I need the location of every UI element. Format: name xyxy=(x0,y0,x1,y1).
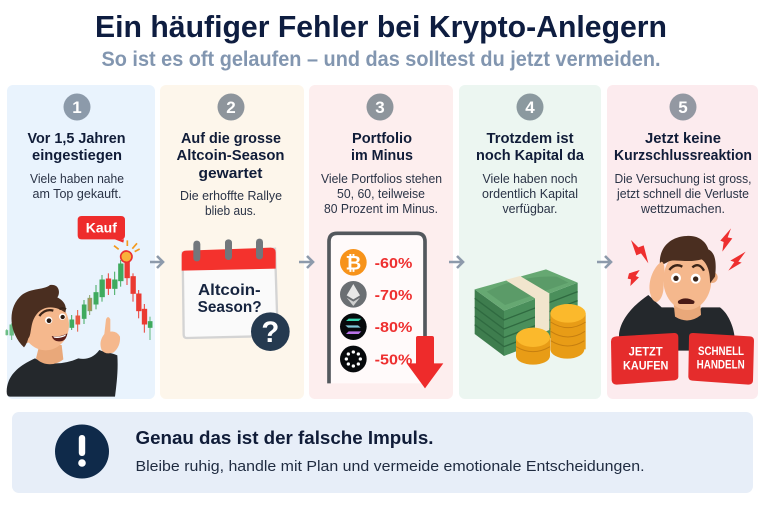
illustration: phone with crypto losses xyxy=(329,233,443,388)
body text: step 3: 80 Prozent im Minus. xyxy=(324,202,438,216)
subtitle: So ist es oft gelaufen – und das solltest du jetzt vermeiden. xyxy=(102,48,660,71)
step number 3: 3 xyxy=(375,98,385,117)
body text: step 4: verfügbar. xyxy=(502,202,558,216)
body text: step 2: blieb aus. xyxy=(205,204,256,218)
coin stacks xyxy=(516,304,586,365)
panel: step 1 xyxy=(6,85,155,399)
coin row: Ethereum -70% xyxy=(340,281,412,308)
step number 1 xyxy=(64,94,90,120)
arrow 3 to 4 xyxy=(449,256,463,268)
heading: step 4: noch Kapital da xyxy=(476,148,585,164)
arrow 2 to 3 xyxy=(299,256,313,268)
body text: step 5 xyxy=(614,172,752,216)
title: Ein häufiger Fehler bei Krypto-Anlegern xyxy=(95,9,667,44)
arrow: red down xyxy=(407,336,443,388)
step number 4 xyxy=(516,94,544,120)
icon: calendar with question mark xyxy=(182,239,290,351)
heading: step 2: Auf die grosse xyxy=(181,131,281,147)
body text: step 3: 50, 60, teilweise xyxy=(337,187,425,201)
body text: step 2: Die erhoffte Rallye xyxy=(180,189,282,203)
step number 2 xyxy=(218,94,244,120)
step number 1: 1 xyxy=(72,98,82,117)
arrow 4 to 5 xyxy=(597,256,611,268)
body text: step 4 xyxy=(482,172,578,216)
candlestick chart xyxy=(6,253,152,340)
coin row: Solana -80% xyxy=(340,313,412,340)
button: SCHNELL HANDELN xyxy=(688,333,754,385)
body text: step 4: Viele haben noch xyxy=(482,172,578,186)
step number 5 xyxy=(670,94,696,120)
person pointing up xyxy=(7,285,120,397)
heading: step 5 xyxy=(614,131,752,164)
panel: step 5 xyxy=(607,85,758,399)
illustration: money stack and coins xyxy=(475,269,586,365)
panel: step 2 xyxy=(160,85,304,399)
body text: step 3 xyxy=(321,172,442,216)
body text: step 4: ordentlich Kapital xyxy=(482,187,578,201)
callout banner xyxy=(12,412,753,493)
icon: calendar with question mark: Altcoin- xyxy=(198,282,261,299)
heading: step 3: im Minus xyxy=(351,148,413,164)
button: JETZT KAUFEN: JETZT xyxy=(629,346,663,359)
icon: calendar with question mark: ? xyxy=(261,316,279,349)
body text: step 1: am Top gekauft. xyxy=(32,187,122,201)
coin row: Polkadot -50% xyxy=(340,346,412,372)
body text: step 2 xyxy=(180,189,282,218)
body text: step 1 xyxy=(30,172,124,201)
illustration: stressed person with buttons xyxy=(611,228,754,385)
button: JETZT KAUFEN: KAUFEN xyxy=(623,359,668,372)
panel: step 3 xyxy=(309,85,453,399)
heading: step 5: Jetzt keine xyxy=(645,131,721,147)
heading: step 2: Altcoin-Season xyxy=(176,148,284,164)
callout text: Bleibe ruhig, handle mit Plan und vermeide emotionale Entscheidungen. xyxy=(136,459,644,475)
body text: step 5: jetzt schnell die Verluste xyxy=(616,187,749,201)
coin row: Bitcoin -60% xyxy=(340,249,412,276)
coin row: Ethereum -70%: -70% xyxy=(375,287,412,304)
heading: step 4: Trotzdem ist xyxy=(486,131,574,147)
body text: step 1: Viele haben nahe xyxy=(30,172,124,186)
coin row: Bitcoin -60%: ₿ xyxy=(345,253,361,274)
heading: step 1: eingestiegen xyxy=(32,148,122,164)
body text: step 5: Die Versuchung ist gross, xyxy=(614,172,752,186)
banknote stack xyxy=(475,269,578,356)
button: JETZT KAUFEN xyxy=(611,333,678,385)
step number 4: 4 xyxy=(525,98,535,117)
coin row: Polkadot -50%: -50% xyxy=(375,351,412,368)
buy marker xyxy=(114,240,140,262)
coin row: Bitcoin -60%: -60% xyxy=(375,255,412,272)
step number 2: 2 xyxy=(226,98,236,117)
callout: Kauf xyxy=(78,216,125,243)
illustration: candlestick chart with buy marker and pointing person xyxy=(6,216,152,397)
heading: step 2 xyxy=(176,131,284,182)
heading: step 5: Kurzschlussreaktion xyxy=(614,148,752,164)
body text: step 5: wettzumachen. xyxy=(640,202,725,216)
icon: exclamation mark xyxy=(55,424,109,478)
heading: step 4 xyxy=(476,131,585,164)
coin row: Solana -80%: -80% xyxy=(375,319,412,336)
icon: calendar with question mark: Season? xyxy=(198,299,262,316)
button: SCHNELL HANDELN: SCHNELL xyxy=(698,345,744,358)
arrow 1 to 2 xyxy=(150,256,163,268)
body text: step 3: Viele Portfolios stehen xyxy=(321,172,442,186)
step number 5: 5 xyxy=(678,98,688,117)
callout heading: Genau das ist der falsche Impuls. xyxy=(136,428,434,448)
button: SCHNELL HANDELN: HANDELN xyxy=(697,359,745,372)
heading: step 1: Vor 1,5 Jahren xyxy=(28,131,126,147)
panel: step 4 xyxy=(459,85,601,399)
lightning bolts xyxy=(628,228,746,286)
heading: step 3 xyxy=(351,131,413,164)
step number 3 xyxy=(366,94,394,120)
heading: step 3: Portfolio xyxy=(352,131,412,147)
stressed person xyxy=(619,236,734,351)
heading: step 2: gewartet xyxy=(198,166,263,182)
heading: step 1 xyxy=(28,131,126,164)
callout: Kauf: Kauf xyxy=(86,220,117,236)
